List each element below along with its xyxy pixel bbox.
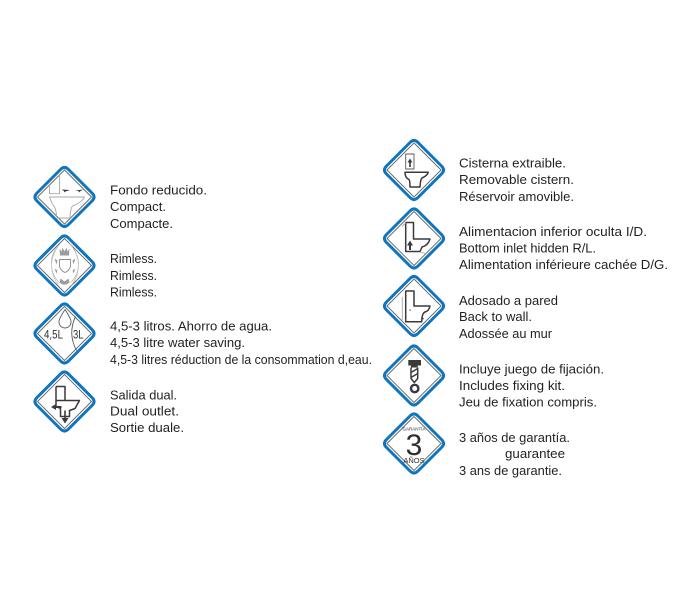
icon: dual outlet (35, 372, 94, 431)
text: rimless (110, 251, 157, 300)
text: guarantee: 3 ans de garantie. (459, 463, 562, 478)
text: water saving: 4,5-3 litre water saving. (110, 335, 245, 350)
icon: removable cistern (384, 140, 444, 200)
text: rimless: Rimless. (110, 268, 157, 283)
text: removable cistern: Cisterna extraible. (459, 156, 566, 170)
text: compact (110, 182, 207, 231)
icon: bottom inlet (384, 209, 444, 268)
text: dual outlet: Dual outlet. (110, 404, 179, 418)
text: bottom inlet: Bottom inlet hidden R/L. (459, 240, 596, 256)
text: fixing kit: Incluye juego de fijación. (459, 362, 604, 376)
text: compact: Compact. (110, 199, 166, 214)
text: water saving: 4,5-3 litros. Ahorro de agua. (110, 318, 272, 334)
text: compact: Fondo reducido. (110, 182, 207, 198)
icon: water saving (35, 304, 94, 363)
icon: water saving: 3L (73, 328, 84, 342)
text: guarantee: 3 años de garantía. (459, 430, 570, 445)
icon: rimless (35, 236, 94, 295)
text: back to wall: Adossée au mur (459, 326, 553, 341)
text: fixing kit: Includes fixing kit. (459, 378, 565, 393)
text: water saving (110, 318, 372, 367)
text: rimless: Rimless. (110, 251, 157, 266)
text: back to wall: Adosado a pared (459, 293, 558, 308)
text: water saving: 4,5-3 litres réduction de la consommation d,eau. (110, 352, 372, 367)
icon: compact toilet (35, 168, 94, 226)
text: bottom inlet (459, 224, 668, 272)
text: dual outlet (110, 388, 184, 435)
text: bottom inlet: Alimentation inférieure cachée D/G. (459, 257, 668, 272)
text: back to wall: Back to wall. (459, 309, 532, 324)
text: removable cistern (459, 156, 574, 204)
text: fixing kit (459, 362, 604, 410)
text: guarantee (459, 430, 570, 478)
text: guarantee: guarantee (505, 446, 565, 461)
text: dual outlet: Sortie duale. (110, 420, 184, 435)
icon: 3 year guarantee (384, 414, 444, 473)
icon: 3 year guarantee: 3 (406, 429, 422, 462)
icon: 3 year guarantee: AÑOS (403, 456, 425, 465)
text: rimless: Rimless. (110, 284, 157, 300)
text: dual outlet: Salida dual. (110, 388, 177, 402)
text: bottom inlet: Alimentacion inferior oculta I/D. (459, 224, 647, 239)
text: removable cistern: Réservoir amovible. (459, 189, 574, 204)
icon: water saving: 4,5L (44, 328, 63, 342)
text: compact: Compacte. (110, 216, 173, 231)
icon: 3 year guarantee: GARANTÍA (402, 426, 426, 432)
icon: fixing kit (384, 346, 444, 405)
text: back to wall (459, 293, 558, 341)
text: fixing kit: Jeu de fixation compris. (459, 394, 597, 410)
text: removable cistern: Removable cistern. (459, 172, 574, 187)
icon: back to wall (384, 276, 444, 336)
